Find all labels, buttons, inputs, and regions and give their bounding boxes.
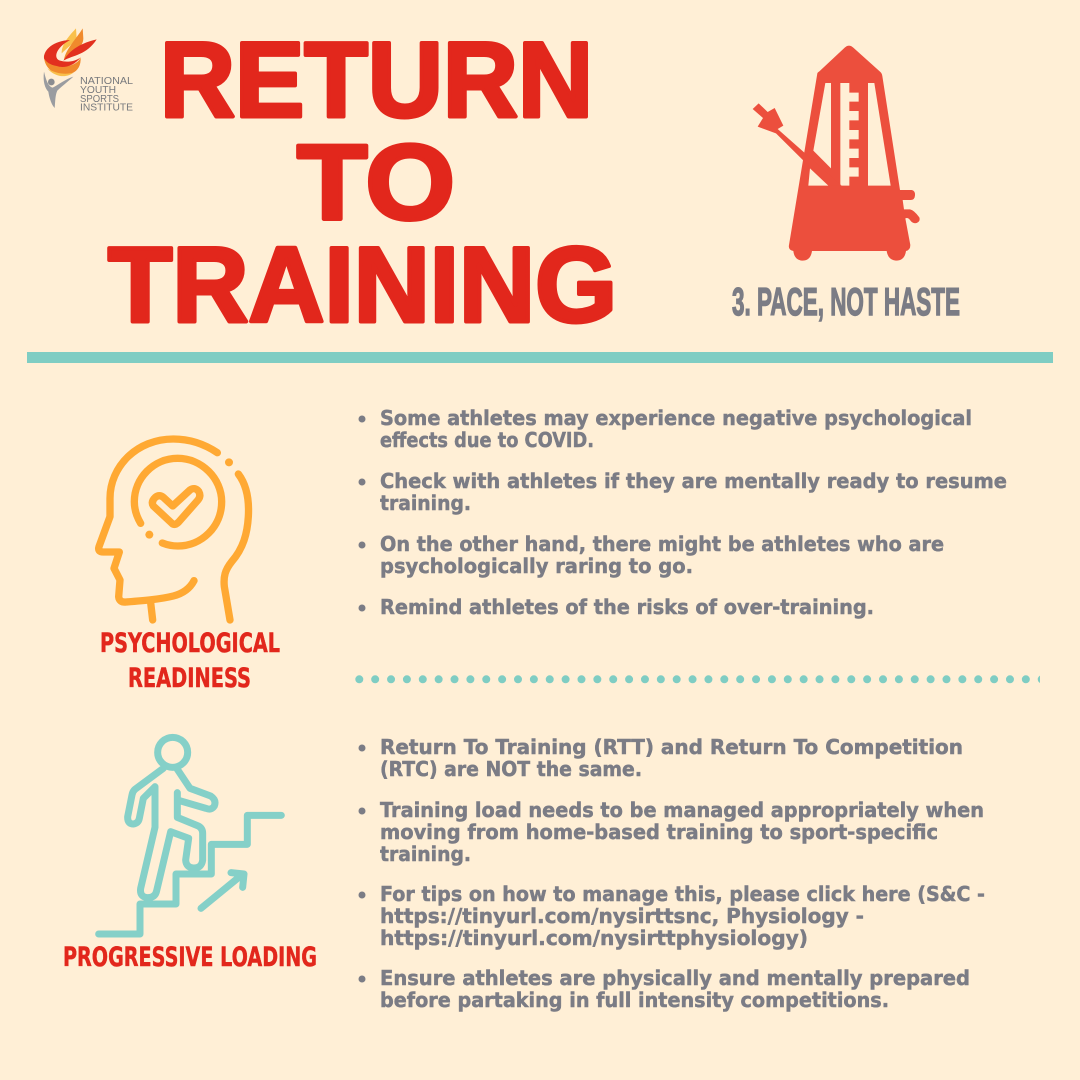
text block: progressive loading bullets: (RTC) are NOT the same.	[380, 757, 642, 781]
text block: progressive loading bullets: For tips on how to manage this, please click here (S&C -	[380, 882, 985, 906]
logo: National Youth Sports Institute: YOUTH	[80, 85, 116, 96]
title	[108, 20, 617, 344]
text block: psychological readiness bullets: Check with athletes if they are mentally ready to resume	[380, 469, 1007, 493]
text block: progressive loading bullets: before partaking in full intensity competitions.	[380, 988, 889, 1012]
text block: psychological readiness bullets: Remind athletes of the risks of over-training.	[380, 595, 874, 619]
text block: progressive loading bullets	[358, 735, 985, 1012]
logo: National Youth Sports Institute: INSTITUTE	[80, 102, 133, 114]
heading: psychological readiness: PSYCHOLOGICAL	[100, 628, 280, 659]
text block: psychological readiness bullets: psychologically raring to go.	[380, 554, 693, 578]
text block: psychological readiness bullets: Some athletes may experience negative psychological	[380, 406, 972, 430]
text block: psychological readiness bullets: On the other hand, there might be athletes who are	[380, 532, 944, 556]
text block: progressive loading bullets: Training load needs to be managed appropriately when	[380, 798, 984, 822]
text block: progressive loading bullets: https://tinyurl.com/nysirttphysiology)	[380, 926, 808, 950]
text block: progressive loading bullets: Return To Training (RTT) and Return To Competition	[380, 735, 963, 759]
text block: progressive loading bullets: training.	[380, 842, 471, 866]
logo: National Youth Sports Institute: NATIONAL	[80, 76, 133, 87]
divider bar	[27, 352, 1053, 363]
icon: metronome	[753, 46, 920, 261]
text block: psychological readiness bullets: training.	[380, 491, 471, 515]
text block: progressive loading bullets: https://tinyurl.com/nysirttsnc, Physiology -	[380, 904, 864, 928]
text block: progressive loading bullets: moving from home-based training to sport-specific	[380, 820, 938, 844]
text block: psychological readiness bullets	[358, 406, 1007, 619]
heading: psychological readiness	[100, 628, 280, 694]
text block: progressive loading bullets: Ensure athletes are physically and mentally prepared	[380, 966, 970, 990]
heading: psychological readiness: READINESS	[128, 663, 251, 694]
logo: National Youth Sports Institute	[44, 28, 133, 113]
heading: progressive loading: PROGRESSIVE LOADING	[63, 942, 317, 973]
text block: psychological readiness bullets: effects due to COVID.	[380, 428, 594, 452]
logo: National Youth Sports Institute: SPORTS	[80, 94, 119, 105]
title: TRAINING	[108, 224, 617, 344]
title: TO	[297, 122, 455, 242]
icon: person climbing stairs	[99, 737, 281, 934]
icon: head with check mark	[99, 439, 249, 620]
title: RETURN	[160, 20, 593, 140]
